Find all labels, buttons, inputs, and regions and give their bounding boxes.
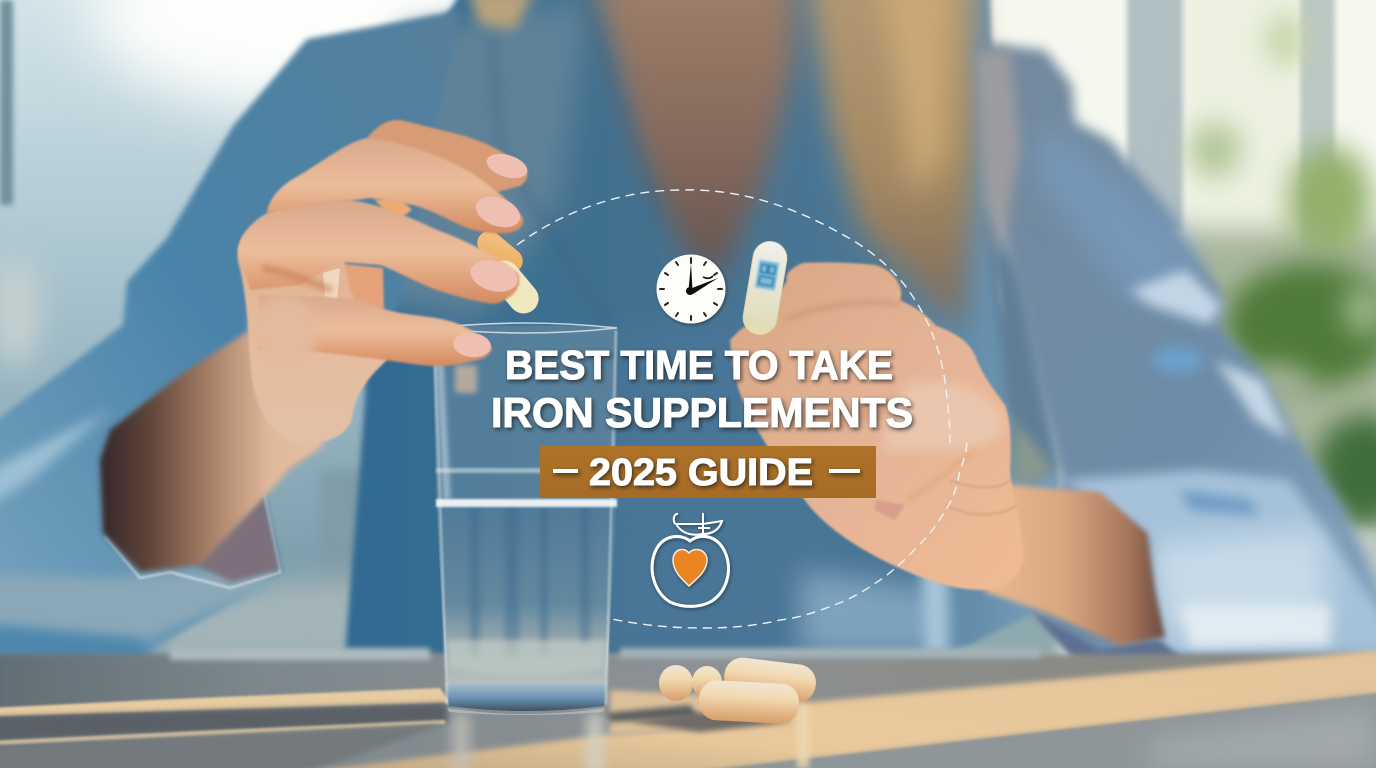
table with sunlight bands [0, 648, 1376, 768]
finger creases and shadows [785, 302, 900, 320]
palm and fist [730, 262, 1023, 590]
right hand holding capsule [730, 262, 1023, 590]
second finger [267, 138, 523, 233]
banner: 2025 guide: 2025 GUIDE [589, 452, 813, 494]
right forearm [985, 483, 1165, 645]
title: best time to take iron supplements [491, 342, 913, 436]
fingernails [452, 149, 530, 359]
capsules pinched in left hand [472, 226, 545, 320]
left sleeve [0, 10, 460, 660]
fourth finger [258, 295, 492, 366]
glass of water [432, 323, 617, 715]
left hand holding capsules [237, 120, 545, 444]
back of hand and palm [237, 200, 387, 444]
capsule label [755, 260, 779, 291]
shirt collar [492, 0, 660, 330]
right sleeve [975, 42, 1376, 668]
hair [468, 0, 980, 330]
title: best time to take iron supplements: IRON SUPPLEMENTS [491, 389, 913, 436]
capsule held in right hand [740, 239, 790, 337]
title: best time to take iron supplements: BEST TIME TO TAKE [505, 342, 893, 388]
icon: clock [656, 254, 726, 324]
icon: apple with heart [652, 513, 728, 606]
neck and chest skin [590, 0, 795, 280]
left forearm [100, 330, 325, 572]
dashed ring around the title [517, 190, 967, 628]
pills on the table [659, 656, 818, 725]
third finger [238, 200, 520, 304]
torso: blue shirt [345, 0, 1060, 655]
banner: 2025 guide [540, 446, 876, 498]
